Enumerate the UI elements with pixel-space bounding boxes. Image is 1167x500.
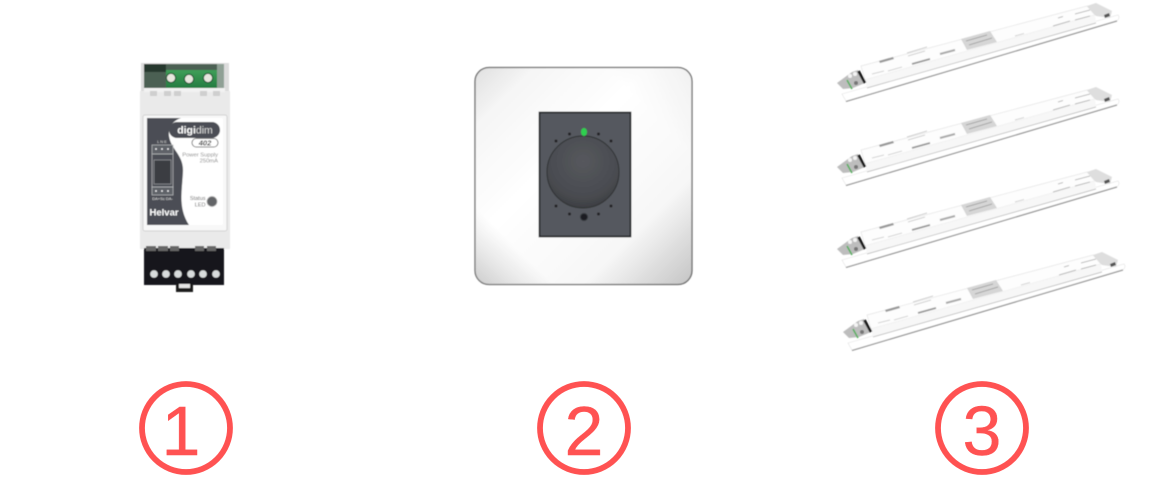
device 2: wall rotary dimmer [475,68,692,284]
top terminal recess [141,63,229,91]
status LED label: LED [195,202,206,208]
dark control panel [540,112,630,236]
model number badge: 402 [198,139,212,148]
bottom terminal connector [144,246,224,292]
rotary knob [547,136,619,208]
device 3: LED drivers stack [837,3,1125,350]
product description: 250mA [200,158,218,164]
digidim badge: digidim [177,124,213,136]
status LED label: Status [190,196,206,202]
level indicator dots [554,132,612,216]
number badge 1 [142,384,230,472]
product description: Power Supply [182,152,218,158]
driver 1 [837,3,1119,102]
number badge 2: 2 [565,392,603,470]
front label panel [143,115,227,231]
driver 2 [837,87,1119,186]
front label panel: DA+Sc DA- [152,196,173,201]
brushed steel plate [475,68,692,284]
terminal labels: L N E [157,139,167,144]
driver 3 [837,169,1119,268]
number badge 1: 1 [162,392,200,470]
device 1: digidim 402 power supply [140,63,230,292]
module housing [140,91,230,249]
IR sensor [580,214,588,220]
driver 4 [843,252,1125,350]
brand name: Helvar [150,208,179,218]
number badge 3: 3 [963,392,1001,470]
green indicator LED [581,128,587,136]
terminal diagram [152,145,173,195]
number badge 2 [540,384,628,472]
number badge 3 [938,384,1026,472]
status LED [207,196,217,206]
